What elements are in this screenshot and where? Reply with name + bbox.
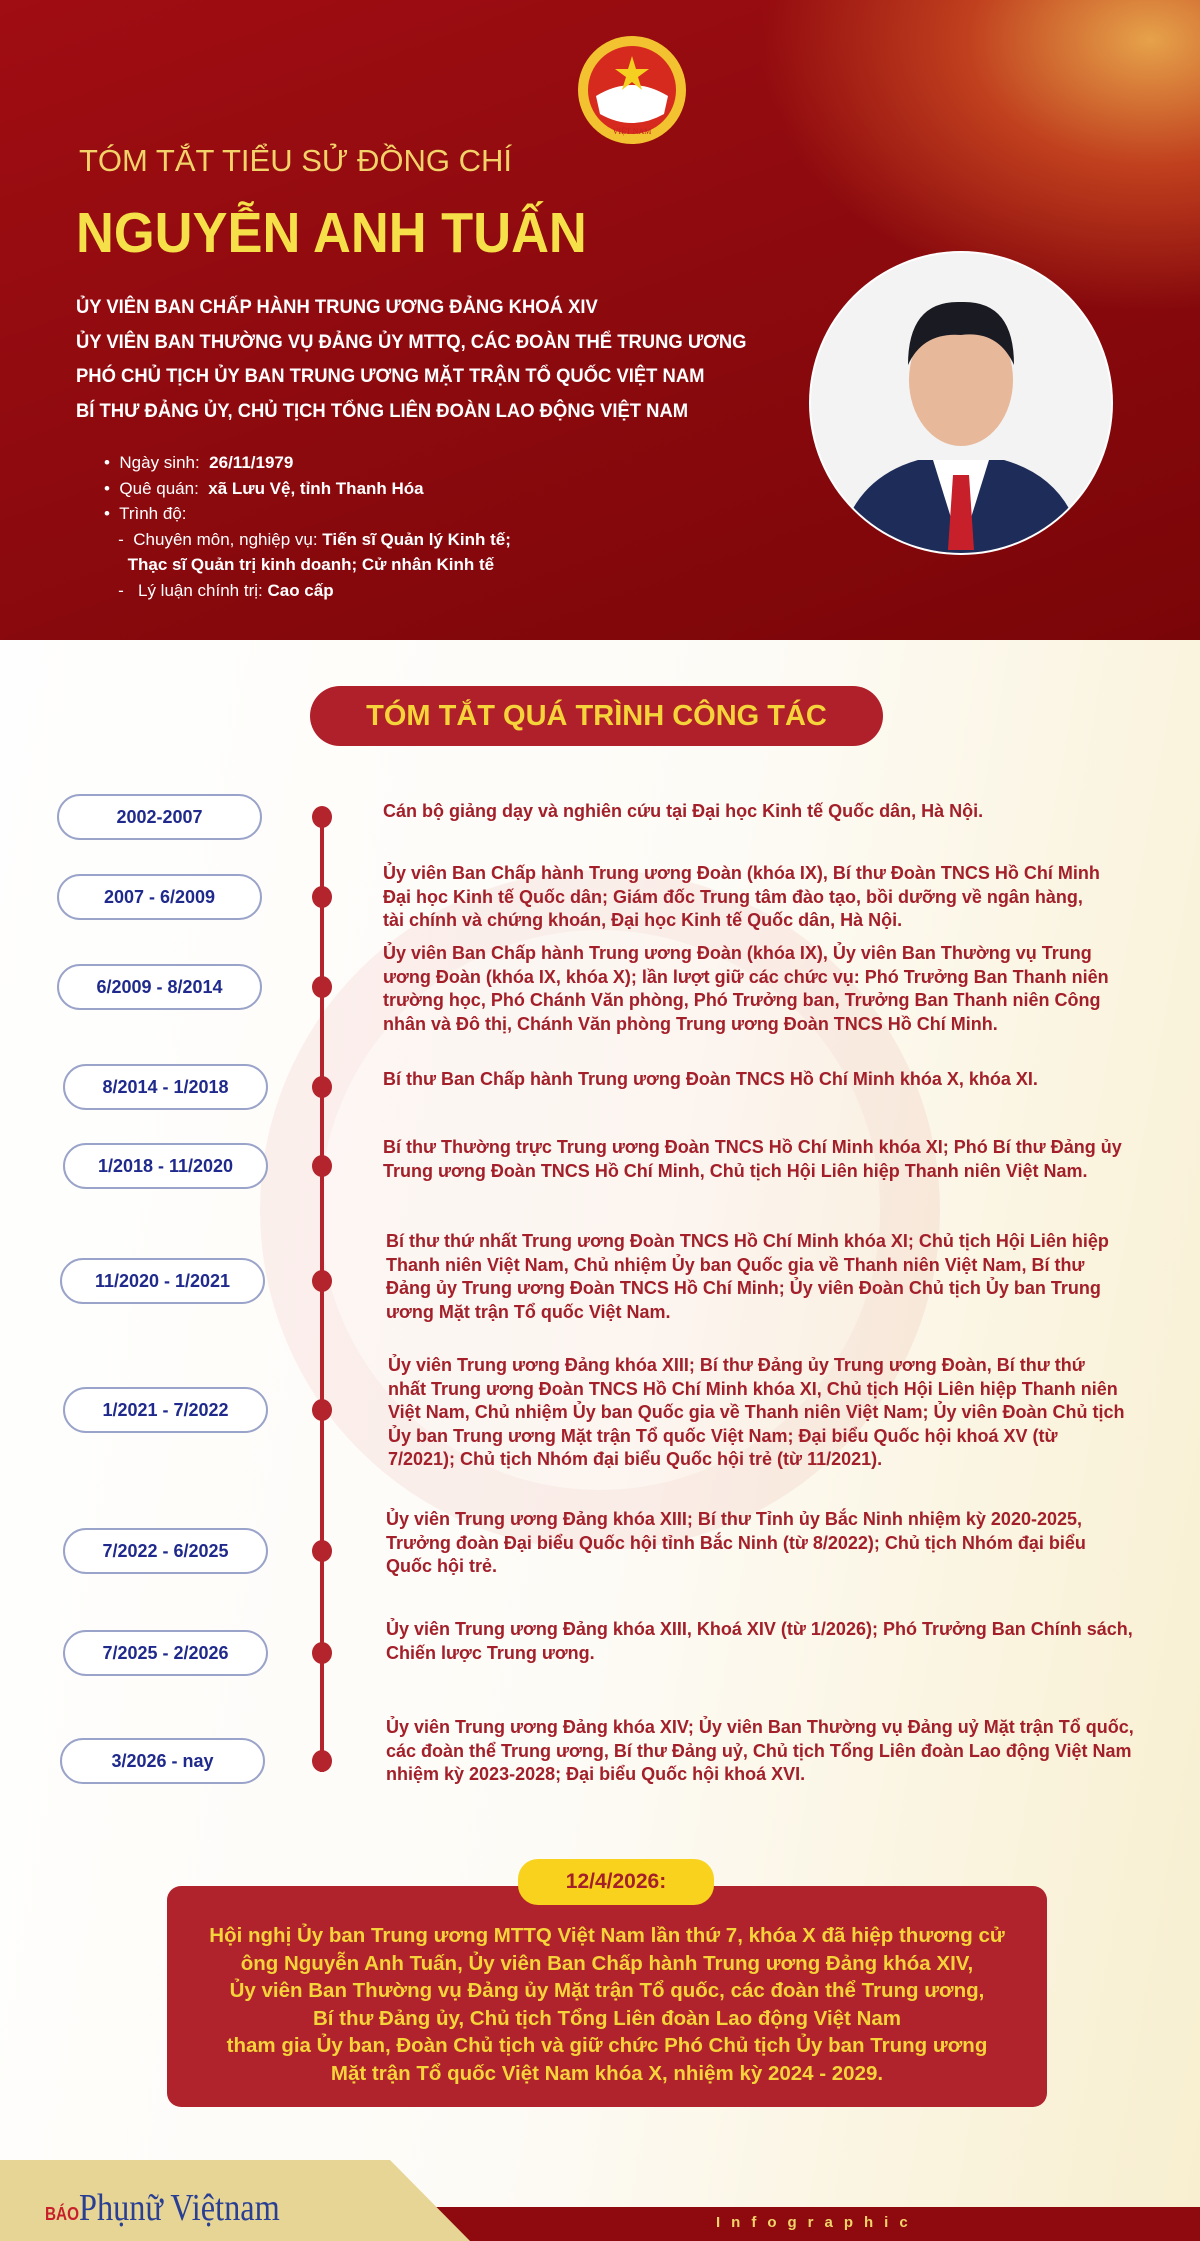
footer beige trapezoid <box>0 2160 470 2241</box>
infographic label: Infographic <box>716 2214 919 2231</box>
header panel <box>0 0 1200 640</box>
entry 7: Việt Nam, Chủ nhiệm Ủy ban Quốc gia về Thanh niên Việt Nam; Ủy viên Đoàn Chủ tịch <box>388 1402 1124 1422</box>
entry 3: 6/2009 - 8/2014 <box>96 976 223 996</box>
callout box: Mặt trận Tổ quốc Việt Nam khóa X, nhiệm kỳ 2024 - 2029. <box>331 2062 883 2084</box>
entry 8 <box>63 1508 1086 1576</box>
entry 10 <box>60 1716 1134 1784</box>
footer red bar <box>330 2207 1200 2241</box>
section title pill <box>310 686 883 746</box>
entry 8: 7/2022 - 6/2025 <box>102 1540 229 1560</box>
entry 7: 1/2021 - 7/2022 <box>102 1400 229 1420</box>
entry 3: trường học, Phó Chánh Văn phòng, Phó Trưởng ban, Trưởng Ban Thanh niên Công <box>383 990 1100 1010</box>
name: NGUYỄN ANH TUẤN <box>76 201 587 265</box>
roles text block: ỦY VIÊN BAN THƯỜNG VỤ ĐẢNG ỦY MTTQ, CÁC ĐOÀN THỂ TRUNG ƯƠNG <box>76 330 746 352</box>
entry 9: Chiến lược Trung ương. <box>386 1642 595 1662</box>
section title pill: TÓM TẮT QUÁ TRÌNH CÔNG TÁC <box>366 700 827 732</box>
callout box <box>167 1886 1047 2107</box>
personal info bullets: • Quê quán: xã Lưu Vệ, tỉnh Thanh Hóa <box>104 478 424 498</box>
title small: TÓM TẮT TIỂU SỬ ĐỒNG CHÍ <box>79 143 512 178</box>
logo: Mat tran To quoc: VIỆT NAM <box>613 126 651 136</box>
timeline line <box>320 812 324 1772</box>
entry 5: Bí thư Thường trực Trung ương Đoàn TNCS Hồ Chí Minh khóa XI; Phó Bí thư Đảng ủy <box>383 1137 1122 1157</box>
entry 6: Thanh niên Việt Nam, Chủ nhiệm Ủy ban Quốc gia về Thanh niên Việt Nam, Bí thư <box>386 1254 1084 1274</box>
roles text block <box>76 296 746 422</box>
entry 8: Quốc hội trẻ. <box>386 1556 497 1576</box>
entry 6 <box>60 1231 1109 1322</box>
entry 2: 2007 - 6/2009 <box>104 886 215 906</box>
brand logo text: BÁOPhụnữ Việtnam <box>45 2187 280 2229</box>
entry 8: Trưởng đoàn Đại biểu Quốc hội tỉnh Bắc Ninh (từ 8/2022); Chủ tịch Nhóm đại biểu <box>386 1532 1086 1552</box>
entry 7: Ủy ban Trung ương Mặt trận Tổ quốc Việt Nam; Đại biểu Quốc hội khoá XV (từ <box>388 1426 1058 1446</box>
watermark emblem <box>260 870 940 1550</box>
entry 9: 7/2025 - 2/2026 <box>102 1642 229 1662</box>
entry 7 <box>63 1354 1124 1469</box>
entry 10: các đoàn thể Trung ương, Bí thư Đảng uỷ, Chủ tịch Tổng Liên đoàn Lao động Việt Nam <box>386 1740 1132 1760</box>
date badge <box>518 1859 714 1905</box>
entry 7: nhất Trung ương Đoàn TNCS Hồ Chí Minh khóa XI, Chủ tịch Hội Liên hiệp Thanh niên <box>388 1378 1118 1398</box>
entry 10: 3/2026 - nay <box>111 1750 214 1770</box>
entry 2: tài chính và chứng khoán, Đại học Kinh tế Quốc dân, Hà Nội. <box>383 910 902 930</box>
entry 2: Đại học Kinh tế Quốc dân; Giám đốc Trung tâm đào tạo, bồi dưỡng về ngân hàng, <box>383 886 1083 906</box>
personal info bullets: - Lý luận chính trị: Cao cấp <box>118 580 334 600</box>
entry 3: ương Đoàn (khóa IX, khóa X); lần lượt giữ các chức vụ: Phó Trưởng Ban Thanh niên <box>383 966 1109 986</box>
entry 6: Đảng ủy Trung ương Đoàn TNCS Hồ Chí Minh; Ủy viên Đoàn Chủ tịch Ủy ban Trung <box>386 1278 1101 1298</box>
roles text block: BÍ THƯ ĐẢNG ỦY, CHỦ TỊCH TỔNG LIÊN ĐOÀN LAO ĐỘNG VIỆT NAM <box>76 400 688 422</box>
personal info bullets: Thạc sĩ Quản trị kinh doanh; Cử nhân Kinh tế <box>128 555 494 574</box>
callout box: Ủy viên Ban Thường vụ Đảng ủy Mặt trận Tổ quốc, các đoàn thể Trung ương, <box>230 1979 984 2002</box>
entry 5: 1/2018 - 11/2020 <box>98 1156 233 1176</box>
personal info bullets: • Ngày sinh: 26/11/1979 <box>104 453 293 472</box>
entry 9 <box>63 1618 1133 1676</box>
entry 4: 8/2014 - 1/2018 <box>102 1076 229 1096</box>
entry 5 <box>63 1137 1122 1189</box>
timeline entries <box>57 794 1134 1784</box>
callout box: Hội nghị Ủy ban Trung ương MTTQ Việt Nam lần thứ 7, khóa X đã hiệp thương cử <box>209 1924 1005 1947</box>
entry 6: ương Mặt trận Tổ quốc Việt Nam. <box>386 1302 671 1322</box>
timeline entries: Bí thư thứ nhất Trung ương Đoàn TNCS Hồ Chí Minh khóa XI; Chủ tịch Hội Liên hiệp <box>386 1231 1109 1251</box>
callout box: Bí thư Đảng ủy, Chủ tịch Tổng Liên đoàn Lao động Việt Nam <box>313 2006 901 2030</box>
entry 7: 7/2021); Chủ tịch Nhóm đại biểu Quốc hội trẻ (từ 11/2021). <box>388 1449 882 1469</box>
roles text block: ỦY VIÊN BAN CHẤP HÀNH TRUNG ƯƠNG ĐẢNG KHOÁ XIV <box>76 296 598 318</box>
timeline entries: Ủy viên Ban Chấp hành Trung ương Đoàn (khóa IX), Ủy viên Ban Thường vụ Trung <box>383 943 1092 963</box>
entry 2 <box>57 862 1100 930</box>
entry 4: Bí thư Ban Chấp hành Trung ương Đoàn TNCS Hồ Chí Minh khóa X, khóa XI. <box>383 1069 1038 1089</box>
date badge: 12/4/2026: <box>566 1870 666 1893</box>
entry 6: 11/2020 - 1/2021 <box>95 1270 230 1290</box>
timeline entries: Ủy viên Trung ương Đảng khóa XIII, Khoá XIV (từ 1/2026); Phó Trưởng Ban Chính sách, <box>386 1619 1133 1639</box>
entry 3: nhân và Đô thị, Chánh Văn phòng Trung ương Đoàn TNCS Hồ Chí Minh. <box>383 1014 998 1034</box>
roles text block: PHÓ CHỦ TỊCH ỦY BAN TRUNG ƯƠNG MẶT TRẬN TỔ QUỐC VIỆT NAM <box>76 365 705 387</box>
entry 5: Trung ương Đoàn TNCS Hồ Chí Minh, Chủ tịch Hội Liên hiệp Thanh niên Việt Nam. <box>383 1160 1088 1180</box>
timeline entries: Ủy viên Trung ương Đảng khóa XIII; Bí thư Đảng ủy Trung ương Đoàn, Bí thư thứ <box>388 1355 1085 1375</box>
portrait photo <box>809 251 1113 555</box>
entry 1: Cán bộ giảng dạy và nghiên cứu tại Đại học Kinh tế Quốc dân, Hà Nội. <box>383 801 983 821</box>
entry 10: nhiệm kỳ 2023-2028; Đại biểu Quốc hội khoá XVI. <box>386 1764 805 1784</box>
personal info bullets <box>104 453 511 600</box>
personal info bullets: - Chuyên môn, nghiệp vụ: Tiến sĩ Quản lý Kinh tế; <box>118 530 511 548</box>
logo: Mat tran To quoc <box>578 36 686 144</box>
entry 1 <box>57 794 983 840</box>
personal info bullets: • Trình độ: <box>104 504 186 523</box>
entry 1: 2002-2007 <box>116 806 203 826</box>
timeline entries: Ủy viên Trung ương Đảng khóa XIV; Ủy viên Ban Thường vụ Đảng uỷ Mặt trận Tổ quốc, <box>386 1717 1134 1737</box>
callout box: tham gia Ủy ban, Đoàn Chủ tịch và giữ chức Phó Chủ tịch Ủy ban Trung ương <box>227 2034 987 2057</box>
timeline entries: Ủy viên Trung ương Đảng khóa XIII; Bí thư Tỉnh ủy Bắc Ninh nhiệm kỳ 2020-2025, <box>386 1509 1082 1529</box>
callout box: ông Nguyễn Anh Tuấn, Ủy viên Ban Chấp hành Trung ương Đảng khóa XIV, <box>241 1952 973 1974</box>
entry 3 <box>57 942 1109 1034</box>
entry 4 <box>63 1064 1038 1110</box>
entry 2: Ủy viên Ban Chấp hành Trung ương Đoàn (khóa IX), Bí thư Đoàn TNCS Hồ Chí Minh <box>383 863 1100 883</box>
